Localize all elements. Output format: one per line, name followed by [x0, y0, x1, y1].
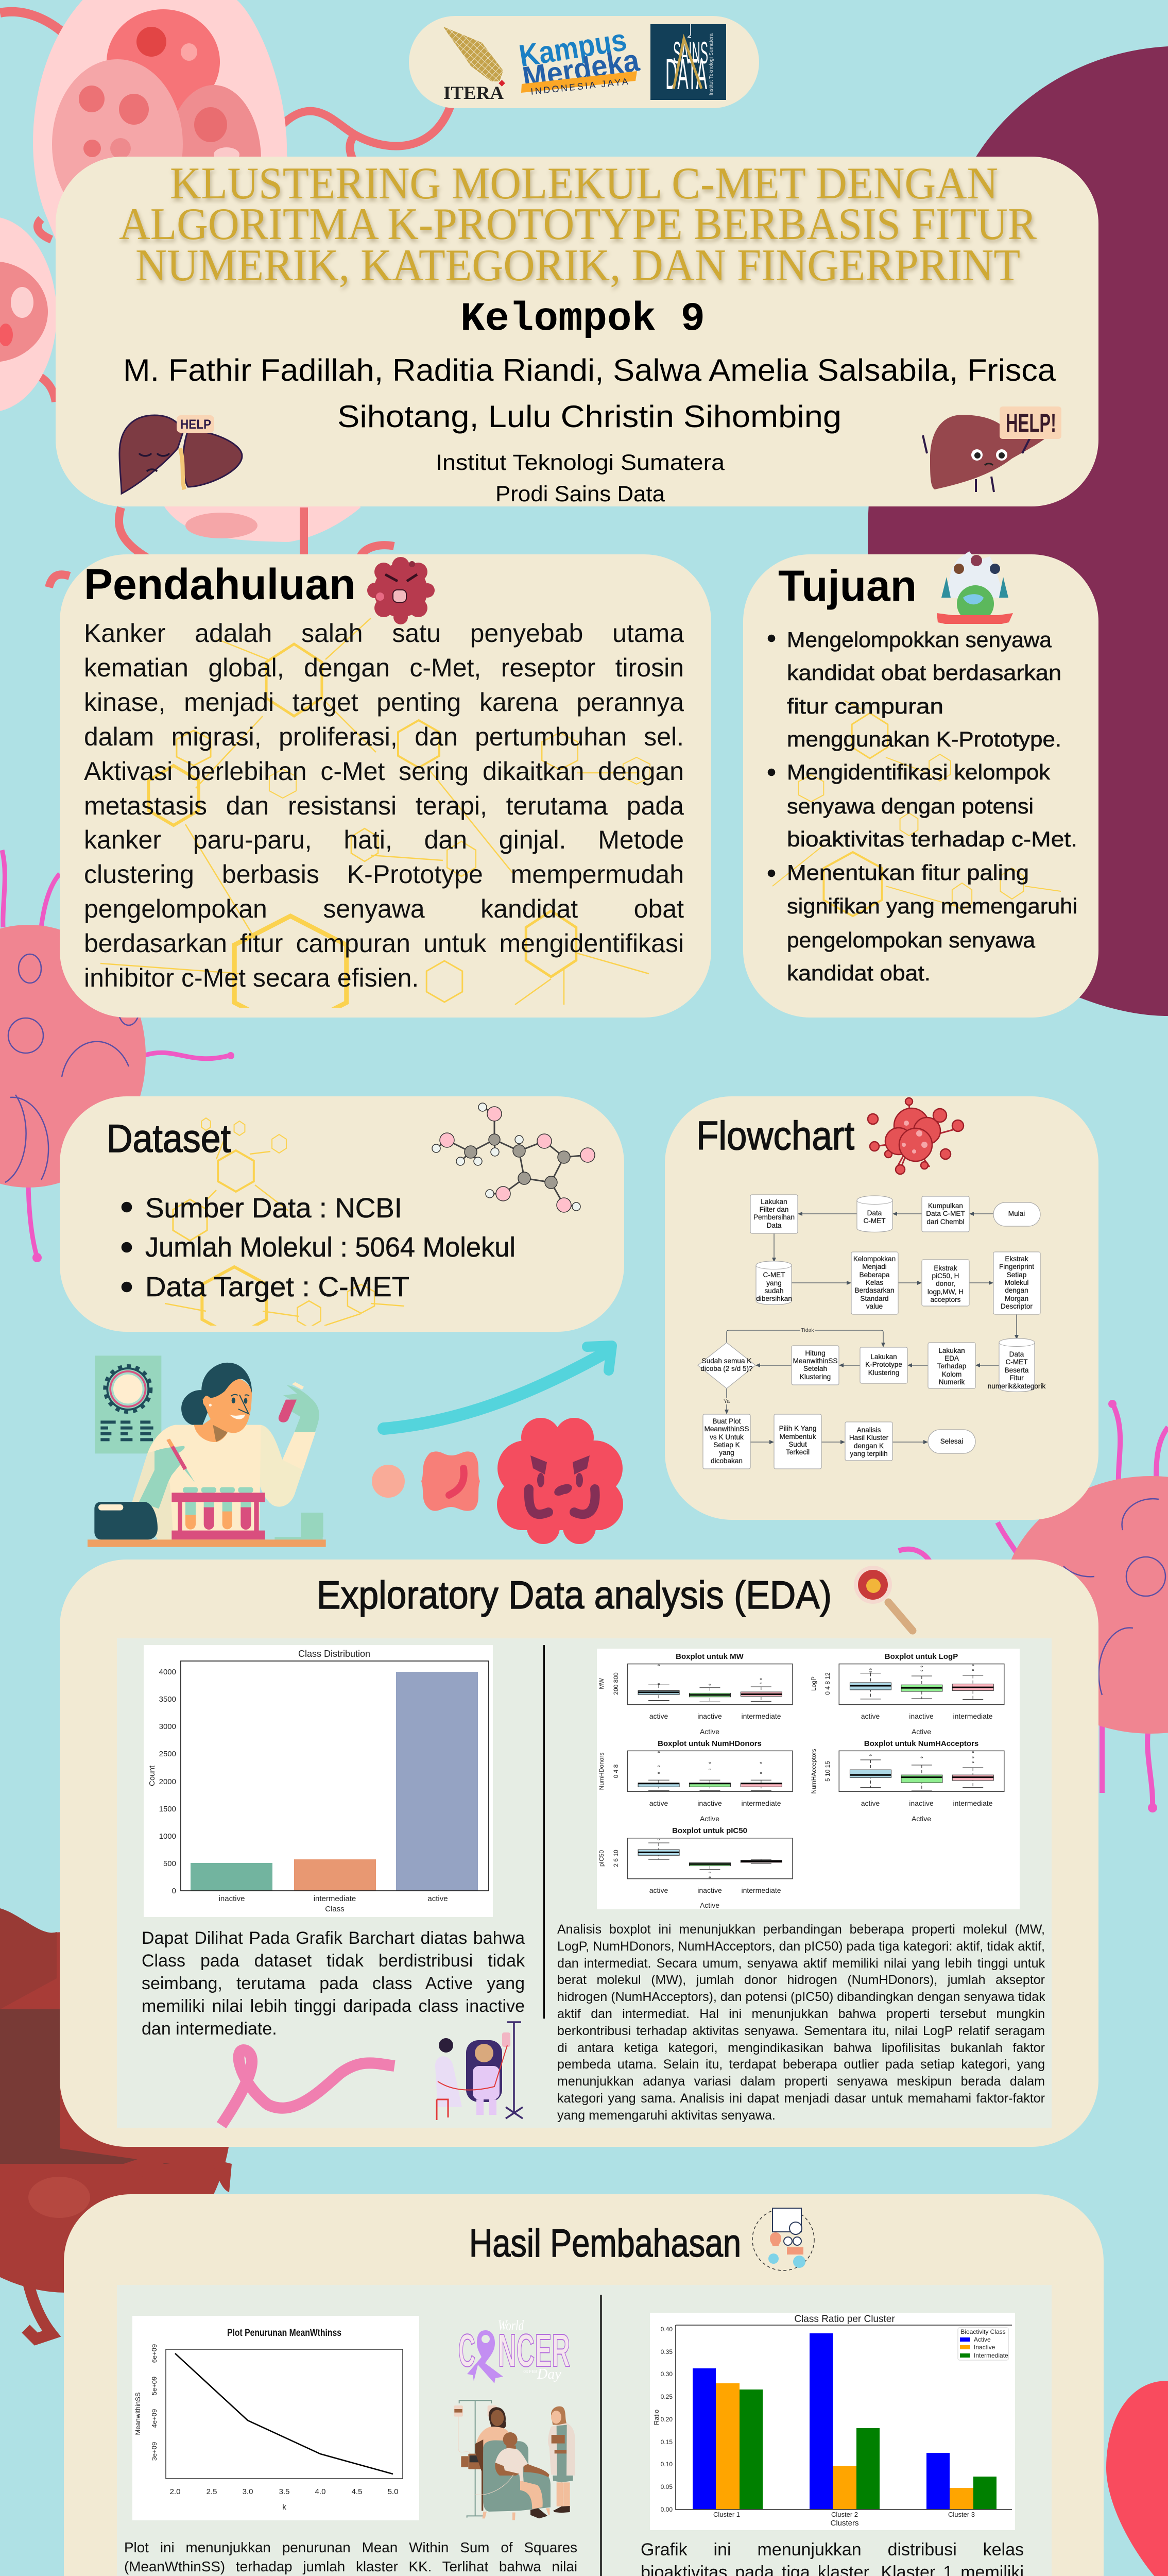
cylinder: data: C-MET [863, 1217, 886, 1225]
cylinder: data [857, 1196, 892, 1232]
box: EDA: EDA [944, 1354, 959, 1362]
list: Jumlah Molekul : 5064 Molekul [145, 1232, 516, 1263]
list: fitur campuran [787, 694, 943, 718]
logo: ITERA [443, 27, 505, 103]
panel: Tujuan [743, 551, 1098, 1018]
chart: boxplots: inactive [909, 1712, 934, 1720]
chart: boxplots: inactive [697, 1799, 722, 1807]
list: Menentukan fitur paling [787, 860, 1029, 885]
label: ya [723, 1398, 731, 1404]
icon: sad liver right [923, 406, 1061, 492]
legend: Intermediate [974, 2352, 1008, 2359]
box: EDA [928, 1343, 975, 1388]
box: kelompokkan: Kelas [866, 1279, 883, 1286]
heading: Hasil Pembahasan [469, 2222, 741, 2265]
decision [698, 1343, 755, 1388]
paragraph: boxplot analysis: aktif dan intermediat. Hal ini menunjukkan bahwa properti tersebut mungkin [557, 2007, 1045, 2021]
box: hitung: Setelah [803, 1365, 827, 1372]
bar chart: class ratio per cluster: Ratio [652, 2410, 660, 2425]
chart: boxplots: Boxplot untuk LogP [885, 1652, 958, 1661]
logo: Sains Data: Institut Teknologi Sumatera [709, 33, 714, 95]
illustration: patient in chair [454, 2400, 575, 2520]
list [122, 1193, 516, 1302]
title: KLUSTERING MOLEKUL C-MET DENGAN [170, 159, 998, 209]
logo: Kampus Merdeka: Kampus [517, 22, 629, 73]
box: ekstrak: donor, [936, 1280, 955, 1287]
chart: boxplots: NumHDonors [598, 1753, 605, 1790]
bar chart: class distribution: 2000 [159, 1777, 176, 1786]
list: kandidat obat. [787, 961, 931, 985]
cylinder: cleaned: C-MET [763, 1271, 785, 1279]
heading: Exploratory Data analysis (EDA) [317, 1573, 832, 1617]
box: analisis: Analisis [857, 1426, 881, 1434]
box: EDA: Terhadap [937, 1362, 966, 1370]
cylinder: cleaned [756, 1261, 792, 1304]
chart: boxplots: inactive [909, 1799, 934, 1807]
box: fingerprint: Ekstrak [1005, 1255, 1028, 1263]
bar chart: class ratio per cluster: 0.25 [661, 2393, 673, 2400]
box: buat plot: dicobakan [711, 1457, 743, 1465]
chart: boxplots: MW [598, 1678, 605, 1689]
cylinder: data beserta fitur: C-MET [1005, 1358, 1028, 1366]
chart: boxplots: 0 4 8 12 [824, 1672, 831, 1695]
institution: Prodi Sains Data [495, 482, 665, 506]
paragraph [84, 616, 684, 997]
logo: Kampus Merdeka: Merdeka [520, 43, 642, 95]
cylinder: data: Data [867, 1209, 882, 1217]
box: filter: Filter dan [760, 1206, 788, 1213]
bar chart: class ratio per cluster: Cluster 3 [948, 2511, 975, 2518]
box: kelompokkan: Kelompokkan [853, 1255, 896, 1263]
bar chart: class distribution: 4000 [159, 1668, 176, 1676]
paragraph: line chart note: (MeanWthinSS) terhadap jumlah klaster KK. Terlihat bahwa nilai [124, 2558, 577, 2574]
box: kelompokkan: value [866, 1302, 883, 1310]
bar chart: class ratio per cluster: 0.00 [661, 2506, 673, 2513]
cylinder: cleaned: sudah [764, 1287, 784, 1295]
box: ekstrak [922, 1260, 969, 1306]
box: pilih: Pilih K Yang [779, 1425, 816, 1432]
box: analisis: Hasil Kluster [849, 1434, 889, 1442]
chart: boxplots: intermediate [953, 1712, 993, 1720]
box: ekstrak: logp,MW, H [927, 1288, 964, 1296]
box: kelompokkan: Menjadi [862, 1263, 887, 1270]
bar chart: class distribution: 3000 [159, 1722, 176, 1731]
legend: Inactive [974, 2344, 995, 2351]
panel: Flowchart [665, 1096, 1098, 1520]
icon: molecule [432, 1103, 595, 1212]
box: kumpulkan: dari Chembl [926, 1218, 965, 1226]
authors: Sihotang, Lulu Christin Sihombing [337, 399, 841, 434]
box: pilih [774, 1414, 821, 1469]
chart: boxplots: 2 6 10 [612, 1850, 620, 1867]
bar chart: class ratio per cluster: Cluster 2 [831, 2511, 858, 2518]
bar chart: class distribution: Class [325, 1905, 345, 1913]
box: kelompokkan: Beberapa [860, 1271, 890, 1279]
heading: Tujuan [778, 562, 917, 610]
chart: boxplots: active [649, 1799, 668, 1807]
box: fingerprint: Descriptor [1001, 1302, 1033, 1310]
icon: sad liver left: HELP [180, 417, 211, 432]
arrow [384, 1346, 612, 1429]
cylinder: cleaned: yang [766, 1279, 782, 1287]
list: Data Target : C-MET [145, 1272, 409, 1302]
paragraph: boxplot analysis: yang memengaruhi aktivitas senyawa. [557, 2108, 776, 2123]
bar chart: class distribution: Class Distribution [298, 1649, 370, 1659]
chart: boxplots: Boxplot untuk NumHDonors [658, 1739, 762, 1748]
box: fingerprint: Morgan [1005, 1295, 1028, 1302]
chart: boxplots: Boxplot untuk pIC50 [672, 1826, 747, 1835]
icon: virus [868, 1098, 964, 1174]
heading: Pendahuluan [84, 560, 355, 608]
logo: Kampus Merdeka [517, 21, 642, 97]
title [119, 159, 1037, 291]
bar chart: class distribution: 1000 [159, 1832, 176, 1841]
box: EDA: Kolom [942, 1370, 961, 1378]
divider [600, 2295, 602, 2576]
box: ekstrak: acceptors [931, 1296, 961, 1303]
paragraph: boxplot analysis: di antara ketiga kategori, mengindikasikan bahwa lipofilisitas bukanlah faktor [557, 2041, 1045, 2055]
decoration: cancer cell cluster top left [0, 0, 451, 587]
heading: Dataset [107, 1117, 231, 1161]
list: Sumber Data : NCBI [145, 1193, 402, 1224]
decision: dicoba (2 s/d 5)? [700, 1365, 753, 1372]
box: filter: Data [767, 1222, 782, 1229]
line chart: mean within SS: Plot Penurunan MeanWthinss [227, 2328, 341, 2338]
line chart: mean within SS: k [282, 2503, 286, 2512]
panel: Dataset [60, 1096, 624, 1337]
paragraph: boxplot analysis: dan intermediat. Secara umum, senyawa aktif memiliki nilai yang lebih tinggi untuk [557, 1956, 1045, 1971]
paragraph: boxplot analysis: hidrogen (NumHAcceptors), dan potensi (pIC50) dibandingkan dengan senyawa tidak [557, 1990, 1045, 2004]
box: kumpulkan: Data C-MET [926, 1210, 965, 1217]
paragraph: line chart note [124, 2538, 577, 2576]
chart: boxplots: 200 800 [612, 1672, 620, 1695]
box: hitung: MeanwithinSS [793, 1357, 837, 1365]
icon: sad liver right: HELP! [1006, 409, 1056, 437]
box: buat plot: vs K Untuk [710, 1433, 744, 1441]
illustration: patient with doctor [435, 2022, 523, 2120]
panel: title [56, 157, 1098, 506]
paragraph: boxplot analysis: berkontribusi terhadap aktivitas senyawa. Sementara itu, nilai LogP relatif seragam [557, 2024, 1045, 2038]
chart: boxplots: active [649, 1712, 668, 1720]
chart: boxplots: intermediate [741, 1712, 781, 1720]
chart: boxplots: Active [912, 1815, 931, 1823]
chart: boxplots: inactive [697, 1886, 722, 1894]
chart: boxplots: 0 4 8 [612, 1764, 620, 1778]
line chart: mean within SS: 2.0 [170, 2487, 180, 2496]
box: analisis: yang terpilih [850, 1450, 888, 1458]
decoration: molecule watermark [772, 701, 1061, 916]
logo: Sains Data: SAINS [673, 36, 708, 70]
paragraph: Aktivasi berlebihan c-Met sering dikaitkan dengan [84, 757, 684, 786]
bar chart: class ratio per cluster: Clusters [830, 2519, 859, 2528]
paragraph: line chart note: Plot ini menunjukkan penurunan Mean Within Sum of Squares [124, 2539, 577, 2555]
logo: Sains Data: DATA [665, 50, 707, 98]
legend: Bioactivity Class [960, 2328, 1006, 2335]
paragraph: boxplot analysis: pembeda utama. Selain itu, terdapat beberapa outlier pada setiap kategori, yang [557, 2057, 1045, 2072]
box: analisis [845, 1422, 892, 1461]
bar chart: class distribution: 2500 [159, 1750, 176, 1758]
terminal: mulai [993, 1202, 1040, 1226]
icon: angry cancer cell [367, 557, 435, 624]
line chart: mean within SS: 3.0 [243, 2487, 253, 2496]
box: buat plot: MeanwithinSS [705, 1425, 749, 1433]
legend [958, 2328, 1008, 2360]
box: pilih: Membentuk [779, 1433, 816, 1440]
box: filter: Pembersihan [753, 1213, 795, 1221]
icon: doctors on globe [937, 551, 1013, 624]
cylinder: cleaned: dibersihkan [756, 1295, 792, 1302]
paragraph: inhibitor c-Met secara efisien. [84, 963, 419, 992]
box: kelompokkan: Standard [860, 1295, 889, 1302]
icon: sad liver left [119, 415, 242, 494]
list: pengelompokan senyawa [787, 928, 1036, 952]
box: fingerprint [993, 1252, 1040, 1314]
paragraph: kinase, menjadi target penting karena perannya [84, 688, 684, 717]
illustration: cancer cells [372, 1418, 623, 1544]
box: EDA: Lakukan [938, 1347, 965, 1354]
paragraph: berdasarkan fitur campuran untuk mengidentifikasi [84, 929, 684, 958]
heading: Flowchart [696, 1113, 854, 1158]
box: fingerprint: Setiap [1007, 1271, 1026, 1279]
bar chart: class distribution [144, 1645, 493, 1917]
panel: Hasil Pembahasan [64, 2194, 1104, 2576]
bar chart: class distribution: intermediate [314, 1894, 356, 1903]
chart: boxplots: Boxplot untuk MW [676, 1652, 744, 1661]
paragraph: boxplot analysis: LogP, NumHDonors, NumHAcceptors, dan pIC50) pada tiga kategori: aktif, tidak aktif, [557, 1939, 1045, 1954]
bar chart: class ratio per cluster: 0.15 [661, 2438, 673, 2446]
chart: boxplots: Active [700, 1815, 719, 1823]
bar chart: class distribution: 1500 [159, 1805, 176, 1814]
chart: boxplots: active [861, 1712, 880, 1720]
chart: boxplots: inactive [697, 1712, 722, 1720]
icon: cancer ribbon text: C [458, 2325, 475, 2377]
box: fingerprint: dengan [1005, 1286, 1028, 1294]
paragraph: boxplot analysis [557, 1921, 1045, 2127]
list: kandidat obat berdasarkan [787, 660, 1061, 685]
box: ekstrak: Ekstrak [934, 1264, 957, 1272]
divider [543, 1645, 545, 2019]
bar chart: class distribution: 500 [163, 1859, 176, 1868]
bar chart: class ratio per cluster [650, 2313, 1015, 2530]
inner panel [117, 2285, 1052, 2576]
line chart: mean within SS: 5e+09 [150, 2377, 158, 2395]
box: filter [750, 1195, 798, 1233]
bar chart: class distribution: active [427, 1894, 448, 1903]
bar chart: class ratio per cluster: 0.20 [661, 2416, 673, 2423]
box: hitung [792, 1346, 839, 1385]
decoration: pink virus right [899, 1400, 1168, 1812]
bar chart: class ratio per cluster: 0.10 [661, 2461, 673, 2468]
box: analisis: dengan K [854, 1442, 884, 1450]
paragraph: boxplot analysis: kategori yang sama. Analisis ini dapat menjadi dasar untuk memahami faktor-faktor [557, 2091, 1045, 2106]
cylinder: data beserta fitur: Fitur [1009, 1374, 1024, 1382]
decoration: molecule watermark [165, 1118, 404, 1337]
label: tidak: Tidak [801, 1327, 814, 1333]
chart: boxplots: Active [912, 1727, 931, 1736]
paragraph: bar chart note: Grafik ini menunjukkan distribusi kelas [641, 2540, 1024, 2560]
box: hitung: Hitung [805, 1349, 826, 1357]
decoration: molecule watermark [100, 618, 650, 1031]
bar chart: class ratio per cluster: Cluster 1 [713, 2511, 740, 2518]
line chart: mean within SS: 4e+09 [150, 2409, 158, 2428]
authors [123, 353, 1056, 434]
box: k-prototype: K-Prototype [865, 1361, 902, 1368]
box: k-prototype [860, 1347, 907, 1383]
icon: cancer ribbon text: NCER [498, 2325, 570, 2377]
chart: boxplots: intermediate [741, 1799, 781, 1807]
box: kelompokkan [851, 1252, 898, 1314]
icon: cancer ribbon text: Day [537, 2366, 561, 2382]
title: NUMERIK, KATEGORIK, DAN FINGERPRINT [135, 241, 1020, 291]
panel: Pendahuluan [60, 554, 711, 1031]
paragraph: Kanker adalah salah satu penyebab utama [84, 619, 684, 648]
inner panel [117, 1638, 1052, 2128]
line chart: mean within SS: 5.0 [388, 2487, 398, 2496]
chart: boxplots: Active [700, 1901, 719, 1909]
bar chart: class ratio per cluster: 0.05 [661, 2483, 673, 2490]
box: fingerprint: Molekul [1005, 1279, 1028, 1286]
decision: Sudah semua K [702, 1357, 751, 1365]
bar chart: class distribution: 0 [172, 1887, 176, 1895]
bar chart: class distribution: Count [148, 1765, 157, 1786]
terminal: selesai: Selesai [940, 1437, 963, 1445]
box: kumpulkan [922, 1196, 969, 1232]
bar chart: class distribution: inactive [219, 1894, 245, 1903]
bar chart: class ratio per cluster: 0.35 [661, 2348, 673, 2355]
box: buat plot: yang [719, 1449, 734, 1456]
group name: Kelompok 9 [460, 297, 705, 342]
authors: M. Fathir Fadillah, Raditia Riandi, Salwa Amelia Salsabila, Frisca [123, 353, 1056, 387]
cylinder: data beserta fitur: Data [1009, 1350, 1024, 1358]
terminal: mulai: Mulai [1008, 1210, 1025, 1217]
line chart: mean within SS: 3.5 [279, 2487, 289, 2496]
panel: EDA [60, 1560, 1098, 2147]
panel: logos [409, 16, 759, 108]
bar chart: class distribution: 3500 [159, 1695, 176, 1704]
paragraph: chart note: seimbang, terutama pada class Active yang [142, 1974, 525, 1993]
paragraph: boxplot analysis: Analisis boxplot ini menunjukkan perbandingan beberapa properti molekul (MW, [557, 1922, 1045, 1937]
box: buat plot: Buat Plot [712, 1417, 741, 1425]
line chart: mean within SS: 4.5 [352, 2487, 362, 2496]
paragraph: chart note: Dapat Dilihat Pada Grafik Barchart diatas bahwa [142, 1928, 525, 1948]
bar chart: class ratio per cluster: 0.40 [661, 2326, 673, 2333]
paragraph: boxplot analysis: menunjukkan adanya variasi dalam properti senyawa meskipun berada dalam [557, 2074, 1045, 2089]
paragraph: kematian global, dengan c-Met, reseptor tirosin [84, 653, 684, 682]
line chart: mean within SS: MeanwithinSS [134, 2392, 142, 2435]
chart: boxplots: pIC50 [598, 1850, 605, 1867]
legend: Active [974, 2336, 991, 2343]
icon: cancer ribbon text: 04 FEB [523, 2369, 537, 2374]
chart: boxplots: NumHAcceptors [810, 1749, 817, 1794]
paragraph: chart note: dan intermediate. [142, 2019, 277, 2039]
icon: cancer ribbon text: World [498, 2318, 524, 2334]
box: buat plot: Setiap K [713, 1441, 740, 1449]
chart: boxplots: active [649, 1886, 668, 1894]
terminal: selesai [928, 1430, 975, 1453]
list: Mengelompokkan senyawa [787, 628, 1052, 652]
decoration: dark red virus left [0, 1908, 232, 2339]
paragraph: boxplot analysis: berat molekul (MW), jumlah donor hidrogen (NumHDonors), jumlah akseptor [557, 1973, 1045, 1987]
list: senyawa dengan potensi [787, 794, 1034, 818]
logo: Kampus Merdeka: INDONESIA JAYA [530, 76, 629, 97]
line chart: mean within SS: 4.0 [315, 2487, 325, 2496]
logo: Sains Data [650, 24, 726, 100]
bar chart: class ratio per cluster: 0.30 [661, 2370, 673, 2378]
paragraph: metastasis dan resistansi terapi, terutama pada [84, 791, 684, 820]
box: k-prototype: Klustering [868, 1369, 899, 1377]
bar chart: class ratio per cluster: Class Ratio per Cluster [794, 2314, 895, 2325]
cylinder: data beserta fitur [988, 1338, 1045, 1392]
paragraph: pengelompokan senyawa kandidat obat [84, 894, 684, 923]
box: pilih: Terkecil [786, 1448, 810, 1456]
line chart: mean within SS: 3e+09 [150, 2442, 158, 2461]
line chart: mean within SS: 6e+09 [150, 2344, 158, 2363]
box: buat plot [703, 1414, 750, 1469]
box: fingerprint: Fingeriprint [999, 1263, 1034, 1270]
box: hitung: Klustering [800, 1373, 831, 1381]
list: Mengidentifikasi kelompok [787, 760, 1051, 784]
cylinder: data beserta fitur: numerik&kategorik [988, 1382, 1045, 1390]
chart: boxplots: Boxplot untuk NumHAcceptors [864, 1739, 978, 1748]
decoration: maroon blob [868, 46, 1168, 1016]
flowchart diagram [698, 1195, 1045, 1469]
icon: magnifier [854, 1566, 913, 1631]
paragraph: kanker paru-paru, hati, dan ginjal. Metode [84, 825, 684, 854]
chart: boxplots: Active [700, 1727, 719, 1736]
paragraph: clustering berbasis K-Prototype mempermudah [84, 860, 684, 889]
icon: cancer ribbon text [458, 2318, 570, 2383]
logo: ITERA: ITERA [443, 82, 504, 103]
paragraph: chart note [142, 1927, 525, 2043]
illustration: scientist [88, 1355, 326, 1547]
box: pilih: Sudut [788, 1440, 807, 1448]
box: EDA: Numerik [939, 1378, 965, 1386]
chart: boxplots: intermediate [953, 1799, 993, 1807]
box: k-prototype: Lakukan [870, 1353, 897, 1361]
icon: pink ribbon [221, 2050, 394, 2125]
chart: boxplots: intermediate [741, 1886, 781, 1894]
list: bioaktivitas terhadap c-Met. [787, 827, 1077, 851]
paragraph: chart note: Class pada dataset tidak berdistribusi tidak [142, 1951, 525, 1971]
box: kumpulkan: Kumpulkan [928, 1202, 963, 1210]
paragraph: chart note: memiliki nilai lebih tinggi daripada class inactive [142, 1996, 525, 2016]
paragraph: dalam migrasi, proliferasi, dan pertumbuhan sel. [84, 722, 684, 751]
box: filter: Lakukan [761, 1198, 787, 1206]
title: ALGORITMA K-PROTOTYPE BERBASIS FITUR [119, 199, 1037, 249]
institution: Institut Teknologi Sumatera [436, 450, 725, 475]
box: ekstrak: piC50, H [932, 1272, 959, 1280]
chart: boxplots: LogP [810, 1676, 817, 1691]
paragraph: bar chart note [641, 2538, 1024, 2576]
institution [436, 450, 725, 506]
chart: boxplots [597, 1649, 1020, 1909]
list: menggunakan K-Prototype. [787, 727, 1061, 751]
cylinder: data beserta fitur: Beserta [1005, 1366, 1029, 1374]
chart: boxplots: active [861, 1799, 880, 1807]
label: ya: Ya [724, 1398, 730, 1404]
line chart: mean within SS: 2.5 [207, 2487, 217, 2496]
icon: analysis [752, 2208, 814, 2270]
list [768, 628, 1077, 985]
decoration: red shapes [590, 2381, 1168, 2576]
box: kelompokkan: Berdasarkan [854, 1286, 895, 1294]
decoration: pink virus left [0, 850, 234, 1262]
line chart: mean within SS [132, 2316, 419, 2520]
list: signifikan yang memengaruhi [787, 894, 1077, 918]
chart: boxplots: 5 10 15 [824, 1761, 831, 1782]
